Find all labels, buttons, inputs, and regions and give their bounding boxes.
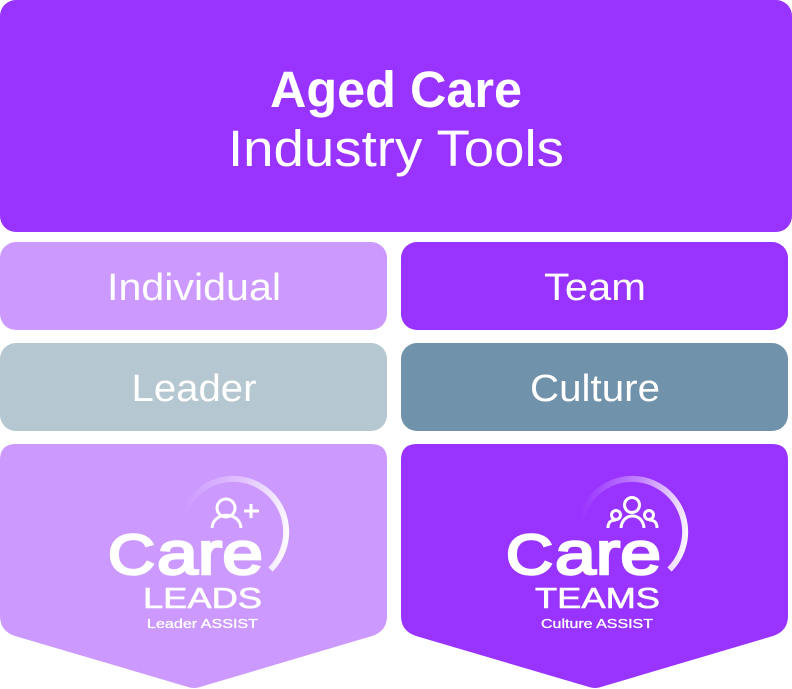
panel: Individual: Individual [107, 267, 281, 309]
logo text: Care [506, 520, 661, 587]
panel: Individual [0, 242, 387, 330]
logo text: Care: are [555, 520, 661, 587]
heading: Aged Care: Aged Care [270, 61, 522, 118]
panel: Team: Team [544, 267, 646, 309]
logo text: Culture ASSIST: Culture ASSIST [541, 617, 653, 631]
icon: gradient arc [182, 479, 286, 570]
panel: Team [401, 242, 788, 330]
panel: Culture [401, 343, 788, 431]
panel: Leader: Leader [132, 368, 257, 410]
icon: gradient arc [581, 479, 685, 570]
panel: title [0, 0, 792, 232]
icon: person with plus [212, 499, 259, 528]
logo text: Leader ASSIST: Leader ASSIST [147, 617, 258, 631]
icon: team of three people [608, 498, 657, 528]
heading: Industry Tools: Industry Tools [228, 120, 564, 177]
panel: Culture: Culture [530, 368, 660, 410]
logo text: Care: C [108, 523, 155, 587]
logo text: Care [108, 520, 263, 587]
logo text: Care: are [157, 520, 263, 587]
panel: Leader [0, 343, 387, 431]
panel: Care Leads chevron [0, 444, 387, 688]
panel: Care Teams chevron [401, 444, 788, 688]
logo text: Care: C [506, 523, 553, 587]
logo text: TEAMS: TEAMS [535, 583, 660, 615]
logo text: LEADS: LEADS [143, 583, 262, 615]
